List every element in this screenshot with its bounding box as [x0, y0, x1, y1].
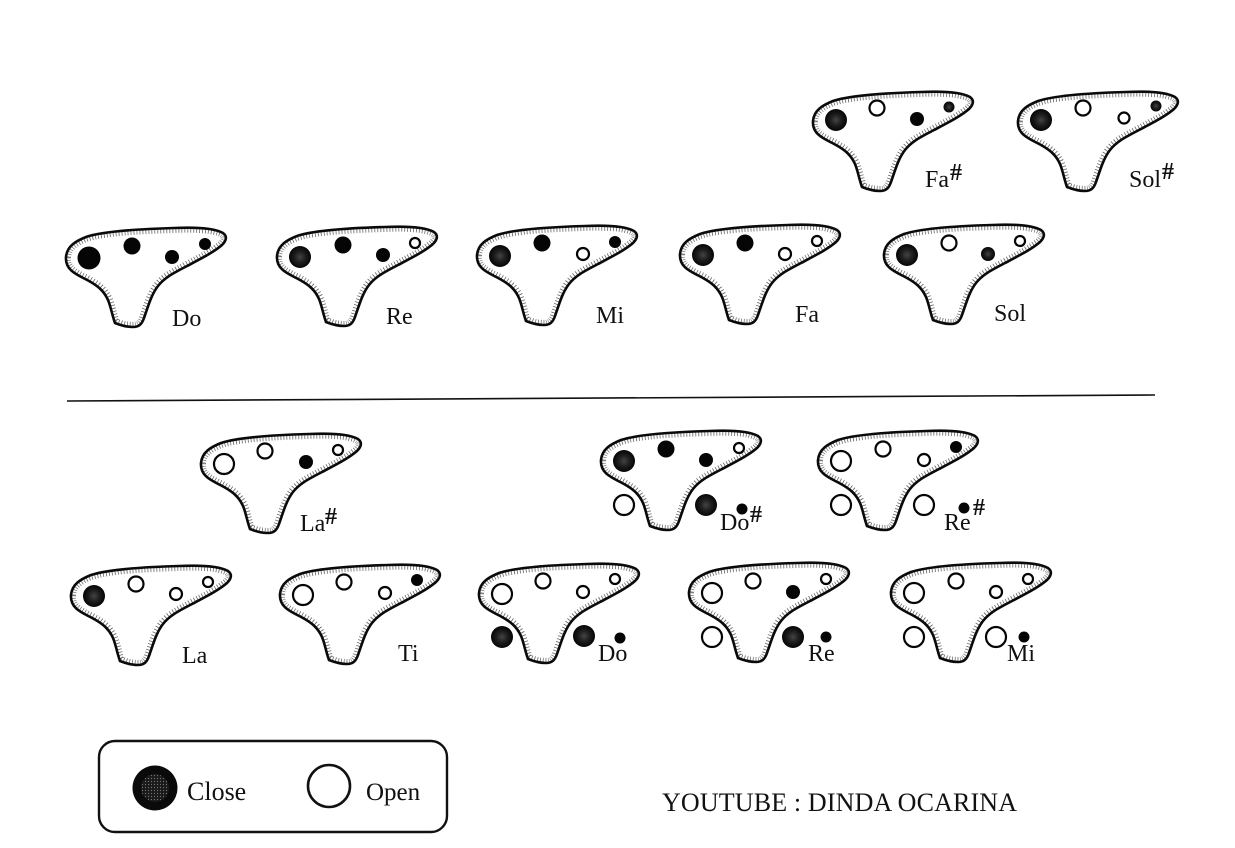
ocarina: Mi [477, 226, 637, 329]
ocarina: high Re with lower holes: Re [808, 641, 835, 667]
ocarina: Sol [884, 225, 1044, 327]
ocarina: Do: Do [172, 306, 201, 332]
ocarina: Do sharp with lower holes [601, 431, 762, 536]
ocarina: high Do with lower holes: Do [598, 641, 627, 667]
ocarina: Mi: Mi [596, 303, 624, 329]
ocarina: Re sharp with lower holes: Re [944, 510, 971, 536]
ocarina: Do [66, 228, 226, 332]
ocarina: Fa sharp: Fa [925, 167, 949, 193]
ocarina: Fa: Fa [795, 302, 819, 328]
legend: close hole [132, 766, 246, 810]
ocarina: La [71, 566, 231, 669]
ocarina: Re [277, 227, 437, 330]
credit text: YOUTUBE : DINDA OCARINA [662, 788, 1017, 817]
ocarina: La sharp: # [325, 504, 337, 530]
ocarina: Ti: Ti [398, 641, 419, 667]
legend: open hole: Open [366, 779, 421, 806]
ocarina: Fa [680, 225, 840, 328]
divider line [67, 395, 1155, 401]
legend: close hole: Close [187, 777, 246, 806]
legend panel [99, 741, 447, 832]
ocarina: Fa sharp: # [950, 160, 962, 186]
ocarina: Sol sharp: # [1162, 159, 1174, 185]
ocarina: high Do with lower holes [479, 564, 639, 667]
ocarina: Fa sharp [813, 92, 973, 193]
ocarina: high Mi with lower holes [891, 563, 1051, 667]
ocarina: Re sharp with lower holes [818, 431, 985, 536]
ocarina: La sharp [201, 434, 361, 537]
ocarina: Do sharp with lower holes: Do [720, 510, 749, 536]
ocarina: Sol sharp [1018, 92, 1178, 193]
ocarina: La sharp: La [300, 511, 326, 537]
ocarina: Do sharp with lower holes: # [750, 502, 762, 528]
ocarina: Sol: Sol [994, 301, 1026, 327]
ocarina: Re: Re [386, 304, 413, 330]
ocarina: Re sharp with lower holes: # [973, 495, 985, 521]
ocarina: La: La [182, 643, 208, 669]
legend: open hole [308, 765, 421, 807]
ocarina: Ti [280, 565, 440, 667]
ocarina: high Mi with lower holes: Mi [1007, 641, 1035, 667]
ocarina: Sol sharp: Sol [1129, 167, 1161, 193]
ocarina: high Re with lower holes [689, 563, 849, 667]
